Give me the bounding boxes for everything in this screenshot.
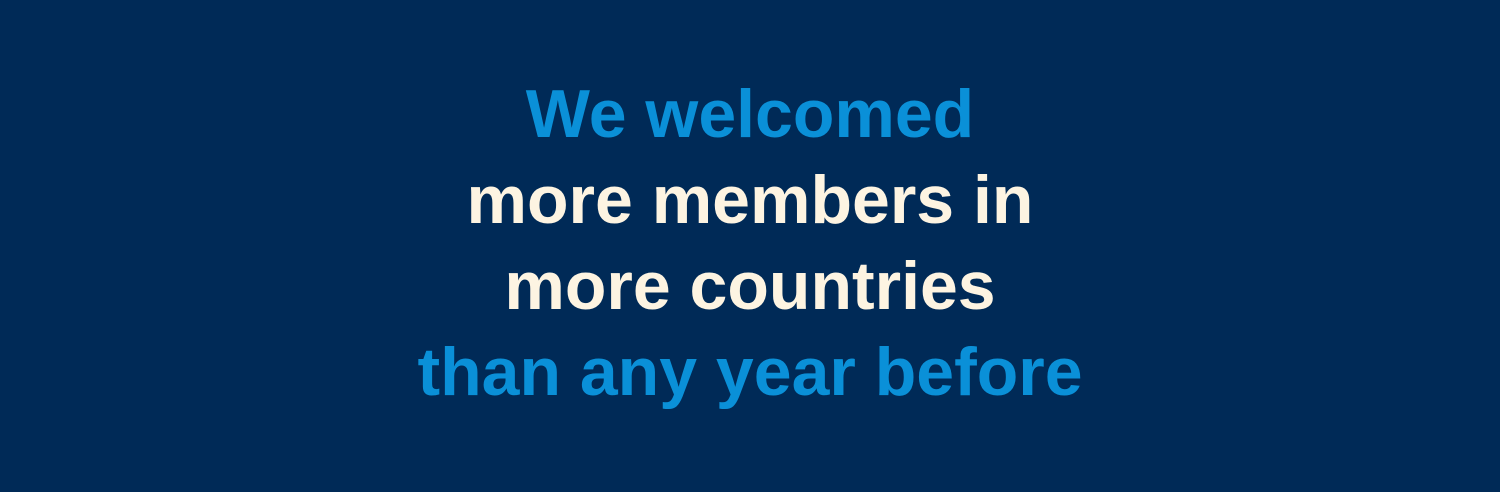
headline line 1 (blue): We welcomed [526, 76, 974, 152]
headline line 3 (cream): more countries [504, 248, 996, 324]
headline line 2 (cream): more members in [467, 162, 1033, 238]
headline text block [417, 76, 1083, 410]
headline line 4 (blue): than any year before [417, 334, 1083, 410]
